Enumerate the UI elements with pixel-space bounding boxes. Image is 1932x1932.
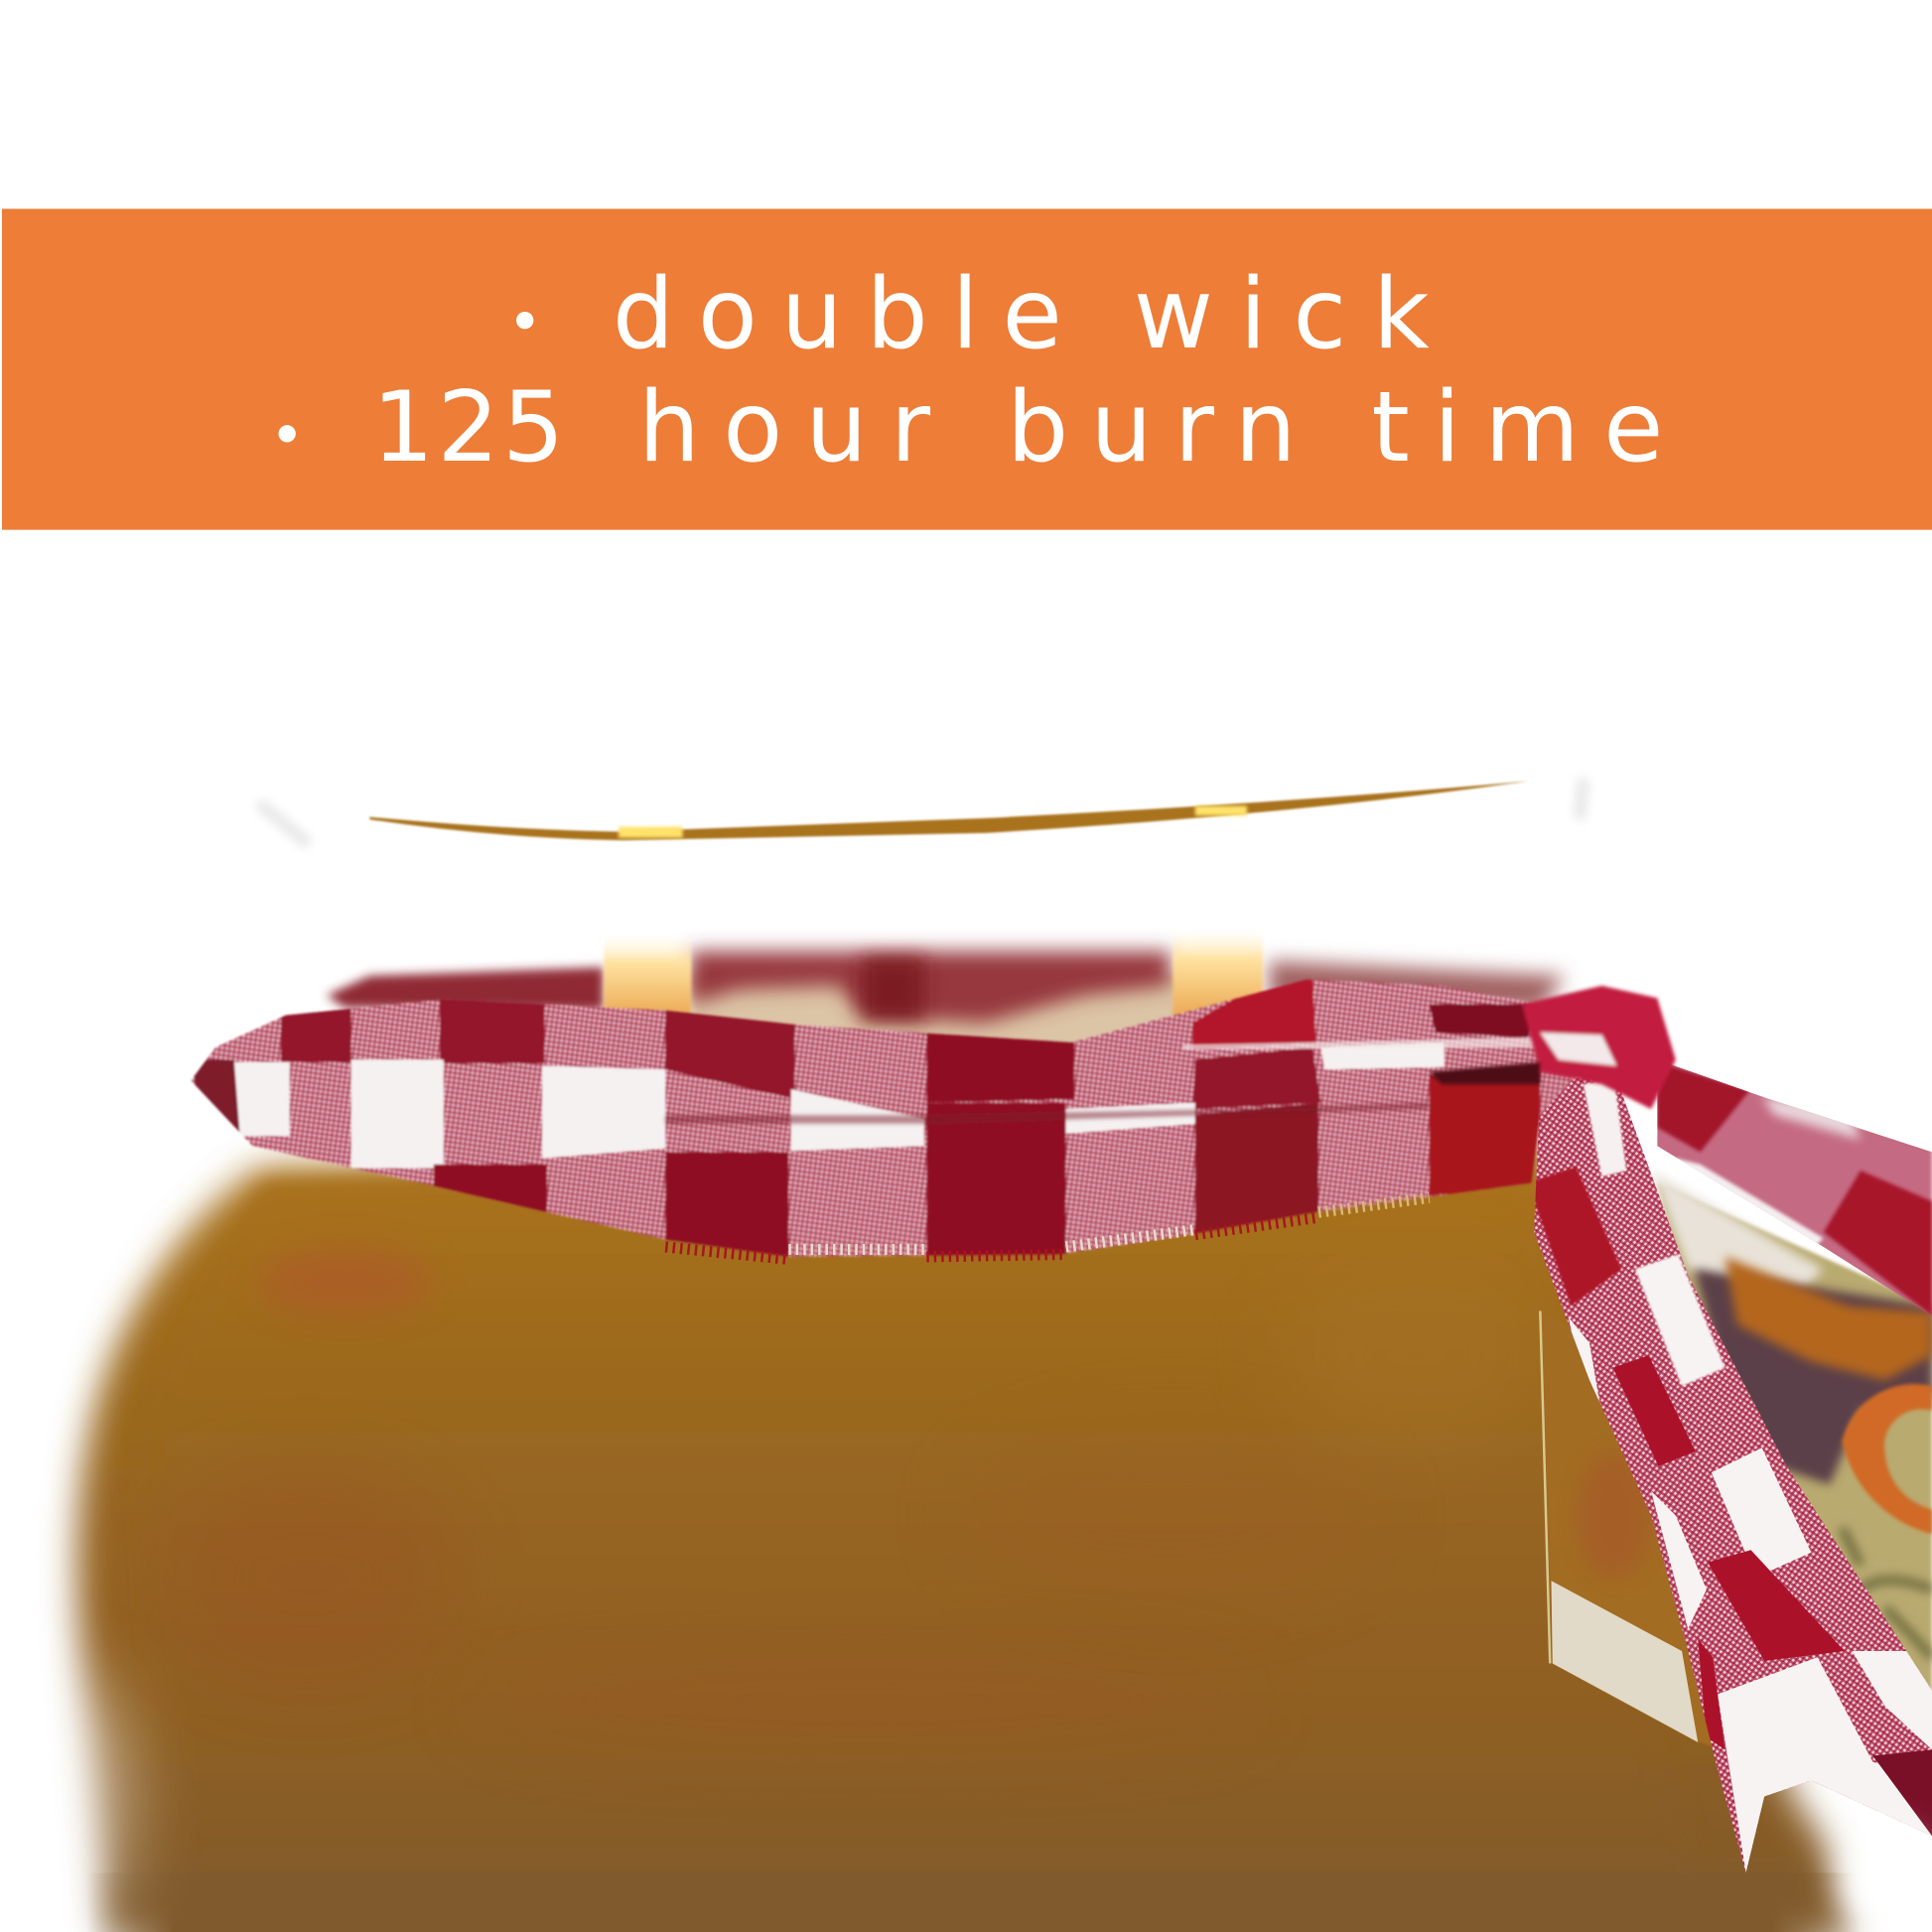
feature: 125 hour burn time [278, 371, 1663, 484]
glass rim with reflected flames [259, 778, 1584, 844]
red checks, lower row [191, 1059, 1540, 1263]
gingham ribbon lower tail [1528, 1059, 1932, 1885]
gingham ribbon band around the jar [185, 973, 1626, 1269]
ribbon fold shadows [665, 1103, 1430, 1124]
candle jar photo [0, 778, 1932, 1932]
right flame glow [1173, 924, 1263, 1023]
tag label artwork [1651, 1171, 1932, 1713]
feature: 125 hour burn time: 125 [372, 371, 564, 484]
hanging tag [1540, 1171, 1932, 1749]
white checks, middle row [234, 1042, 1445, 1169]
dark red checks, upper row [281, 973, 1540, 1109]
blurred fabric and wax seen through the glass [327, 951, 1565, 1053]
feature: double wick: double [613, 258, 1062, 371]
gingham ribbon upper tail [1657, 1064, 1932, 1316]
wax mottling [0, 1249, 1553, 1928]
ribbon knot [1430, 986, 1676, 1109]
left flame glow [604, 930, 691, 1023]
wax body [0, 1140, 1861, 1932]
soft white fade at jar right base [1839, 1834, 1932, 1932]
feature: double wick: wick [1134, 258, 1430, 371]
frayed ribbon edge [665, 1197, 1430, 1259]
orange banner [2, 208, 1932, 530]
feature: 125 hour burn time: time [1371, 371, 1663, 484]
feature: double wick [516, 258, 1430, 371]
feature: 125 hour burn time: hour [638, 371, 931, 484]
feature: 125 hour burn time: burn [1007, 371, 1297, 484]
